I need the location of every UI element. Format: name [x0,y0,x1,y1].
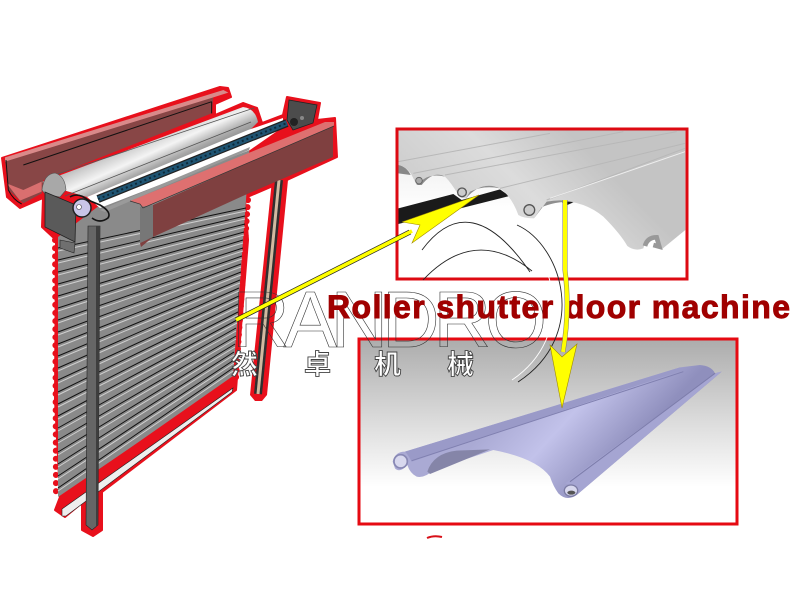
callout: single slat profile panel [359,339,737,524]
arrow: door to slat close-up [236,195,479,320]
black band behind slats [398,189,509,224]
watermark: Chinese company name: 械 [447,350,474,380]
small red mark [427,536,442,538]
slat shading [417,175,573,218]
watermark: RANDRO outline: RANDRO [232,275,547,364]
slat highlights [58,211,246,491]
bottom bar of door [60,376,233,516]
watermark: Chinese company name [231,350,474,380]
arrow: close-up to slat profile [550,200,577,408]
right side guide rail [250,180,288,401]
rolled curtain cylinder [42,107,258,197]
left end bracket and pulley [45,192,109,253]
callout: slat close-up panel [397,129,687,279]
slat lines [58,208,246,488]
watermark: Chinese company name: 机 [374,350,401,380]
top hood front panel [130,122,334,247]
shutter door curtain [58,140,250,497]
top hood back panel [5,90,228,204]
shutter door assembly drawing [2,87,337,536]
slat surface [398,130,685,250]
right end bracket [287,100,317,130]
white strip and blue torsion rod [87,118,287,212]
title: Roller shutter door machine [327,289,790,325]
red silhouette outline [2,87,337,536]
watermark: Chinese company name: 然 [231,350,258,380]
watermark: Chinese company name: 卓 [304,350,331,380]
front vertical guide post [86,226,100,530]
slat profile shape [393,365,722,498]
watermark: logo arcs [422,222,562,382]
